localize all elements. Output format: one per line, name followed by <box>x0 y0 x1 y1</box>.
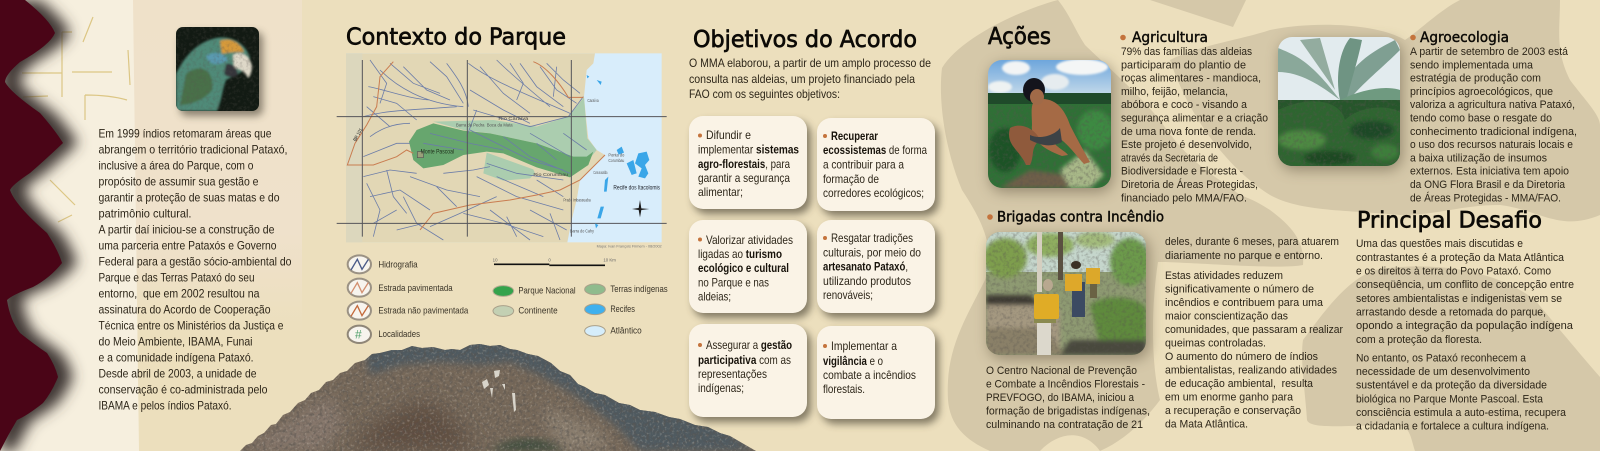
intro text block: propósito de assumir sua gestão e <box>98 174 259 188</box>
principal desafio text: opondo a integração da população indígena <box>1356 320 1574 332</box>
intro text block: Desde abril de 2003, a unidade de <box>98 366 257 380</box>
agricultura text: Biodiversidade e Floresta - <box>1121 166 1243 178</box>
legend: atlantico: Atlântico <box>610 326 642 336</box>
card: sistemas agro-florestais: agro-florestais, para <box>698 158 790 171</box>
agricultura text: abóbora e coco - visando a <box>1121 99 1248 111</box>
brigadas text column 2: deles, durante 6 meses, para atuarem <box>1165 236 1339 248</box>
card: gestao participativa: representações <box>698 368 767 381</box>
Agricultura section <box>1120 30 1268 204</box>
scale bar: 10 <box>493 258 498 263</box>
card: turismo ecologico <box>689 220 811 318</box>
card: gestao participativa: participativa com as <box>698 354 791 367</box>
agroecologia text: o uso dos recursos naturais locais e <box>1410 139 1573 151</box>
intro text block: e a comunidade indígena Pataxó. <box>98 350 254 364</box>
brigadas text column 2: significativamente o número de <box>1165 284 1314 296</box>
objectives intro text: consulta nas aldeias, um projeto financiado pela <box>689 73 915 86</box>
bullet <box>1410 35 1416 40</box>
legend: recifes: Recifes <box>610 304 635 314</box>
intro text block: entorno, que em 2002 resultou na <box>98 286 260 300</box>
map <box>337 53 667 248</box>
legend: terras indigenas <box>585 284 668 295</box>
Agroecologia section <box>1410 30 1577 204</box>
legend: hidrografia: Hidrografia <box>378 259 418 269</box>
agricultura text: 79% das famílias das aldeias <box>1121 46 1252 58</box>
intro text block: garantir a proteção de suas matas e do <box>98 190 280 204</box>
intro text block: Federal para a gestão sócio-ambiental do <box>98 254 292 268</box>
card: artesanato: renováveis; <box>823 289 873 302</box>
agroecologia text: estratégia de produção com <box>1410 73 1541 85</box>
agroecologia text: sendo implementada uma <box>1410 59 1534 71</box>
map legend <box>348 255 668 343</box>
legend: localidades: Localidades <box>378 329 420 339</box>
agroecologia text: tendo como base o resgate do <box>1410 112 1552 124</box>
principal desafio text: Uma das questões mais discutidas e <box>1356 238 1523 250</box>
card: recuperar ecossistemas: Recuperar <box>831 130 878 143</box>
map: Caraíva <box>587 98 599 103</box>
brigadas text column 1: culminando na contratação de 21 <box>986 419 1143 431</box>
intro text block: abrangem o território tradicional Pataxó, <box>98 142 288 156</box>
agroecologia text: externos. Esta iniciativa tem apoio <box>1410 166 1569 178</box>
photo: banana plants <box>1278 37 1402 170</box>
brigadas text column 2: a recuperação e conservação <box>1165 405 1301 417</box>
intro text block: Em 1999 índios retomaram áreas que <box>98 126 272 140</box>
principal desafio text: e os direitos à terra do Povo Pataxó. Como <box>1356 266 1551 278</box>
intro text block: Parque e das Terras Pataxó do seu <box>98 270 254 284</box>
heading: Principal Desafio: Principal Desafio <box>1357 208 1542 234</box>
card: recuperar ecossistemas: a contribuir para a <box>823 158 904 172</box>
card: turismo ecologico: Valorizar atividades <box>706 234 793 247</box>
map: Barra da Pedra Boca da Mata <box>456 123 513 128</box>
agricultura text: de uma nova fonte de renda. <box>1121 126 1256 138</box>
card: turismo ecologico: no Parque e nas <box>698 276 769 290</box>
map: Monte Pascoal <box>421 149 454 156</box>
agricultura text: milho, feijão, melancia, <box>1121 86 1228 98</box>
parrot photo <box>176 27 263 116</box>
agroecologia text: princípios agroecológicos, que <box>1410 86 1553 98</box>
legend: recifes <box>585 304 635 315</box>
agricultura text: através da Secretaria de <box>1121 152 1218 164</box>
card: artesanato: culturais, por meio do <box>823 246 921 260</box>
principal desafio text: arrastando desde a retomada do parque, <box>1356 306 1546 318</box>
brigadas text column 1: O Centro Nacional de Prevenção <box>986 365 1137 377</box>
principal desafio text: contrastantes é a proteção da Mata Atlântica <box>1356 252 1565 264</box>
brigadas text column 2: em um enorme ganho para <box>1165 392 1294 404</box>
objectives intro text: FAO com os seguintes objetivos: <box>689 88 840 101</box>
card: recuperar ecossistemas: corredores ecológicos; <box>823 187 924 200</box>
map: Rio Caraíva <box>498 116 529 121</box>
agricultura text <box>1121 46 1268 204</box>
mountain photo <box>240 336 756 451</box>
intro text block: inclusive a área do Parque, com o <box>98 158 254 172</box>
brigadas text column 1: formação de brigadistas indígenas, <box>986 406 1150 418</box>
card: sistemas agro-florestais: garantir a segurança <box>698 172 790 185</box>
bullet <box>987 214 993 220</box>
agricultura text: financiado pelo MMA/FAO. <box>1121 192 1247 204</box>
map: Prado Imbassuaba <box>563 197 591 202</box>
brigadas text column 2: da Mata Atlântica. <box>1165 418 1248 430</box>
card: vigilancia: Implementar a <box>831 340 897 353</box>
intro text block: A partir daí iniciou-se a construção de <box>98 222 275 236</box>
map: Rio Corumbau <box>533 172 569 177</box>
brigadas text column 2: Estas atividades reduzem <box>1165 270 1283 282</box>
brigadas text column 2: ambientalistas, realizando atividades <box>1165 364 1337 376</box>
legend: estrada pavimentada: Estrada pavimentada <box>378 283 453 293</box>
card: recuperar ecossistemas <box>817 118 939 216</box>
brigadas text column 1 <box>986 365 1150 431</box>
principal desafio text: consciência estimula a auto-estima, recupera <box>1356 407 1567 419</box>
card: gestao participativa: indígenas; <box>698 382 744 395</box>
legend: continente <box>493 306 558 316</box>
intro text block: do Meio Ambiente, IBAMA, Funai <box>98 334 252 348</box>
card: recuperar ecossistemas: formação de <box>823 173 879 186</box>
legend: estrada pavimentada <box>348 279 453 297</box>
map: Corumbau <box>608 158 625 163</box>
left paper panel <box>0 0 302 451</box>
brigadas text column 1: PREVFOGO, do IBAMA, iniciou a <box>986 392 1135 404</box>
card: artesanato <box>817 220 939 318</box>
map: BR 101 <box>352 127 364 143</box>
principal desafio text: sustentável e da proteção da diversidade <box>1356 380 1547 392</box>
photo: fire brigade <box>983 232 1150 359</box>
intro text block <box>98 126 292 412</box>
principal desafio text: com a proteção da floresta. <box>1356 334 1482 346</box>
scale bar: 0 <box>548 258 551 263</box>
brigadas text column 2: diariamente no parque e entorno. <box>1165 250 1323 262</box>
card: gestao participativa: Assegurar a gestão <box>706 339 792 352</box>
card: sistemas agro-florestais: implementar sistemas <box>698 144 799 156</box>
card: vigilancia: combate a incêndios <box>823 369 916 382</box>
intro text block: conservação é co-administrada pelo <box>98 382 268 396</box>
agroecologia text: da ONG Flora Brasil e da Diretoria <box>1410 179 1566 191</box>
card: gestao participativa <box>689 324 811 422</box>
scale bar: 10 Km <box>603 258 616 263</box>
brigadas text column 2: incêndios e contribuem para uma <box>1165 297 1324 309</box>
card: vigilancia: florestais. <box>823 383 865 396</box>
camouflage background pattern <box>941 0 1600 451</box>
card: artesanato: utilizando produtos <box>823 275 911 288</box>
legend: estrada nao pavimentada: Estrada não pavimentada <box>378 306 468 316</box>
agroecologia text: a baixa utilização de insumos <box>1410 152 1547 164</box>
principal desafio text: biológica no Parque Monte Pascoal. Esta <box>1356 394 1544 406</box>
card: artesanato: Resgatar tradições <box>831 232 913 245</box>
brigadas text column 2: O aumento do número de índios <box>1165 351 1318 363</box>
card: sistemas agro-florestais: Difundir e <box>706 129 751 142</box>
heading: Agricultura: Agricultura <box>1132 30 1208 46</box>
card: turismo ecologico: ecológico e cultural <box>698 262 789 275</box>
principal desafio text: No entanto, os Pataxó reconhecem a <box>1356 352 1527 364</box>
heading: Objetivos do Acordo: Objetivos do Acordo <box>693 27 917 53</box>
legend: parque nacional: Parque Nacional <box>518 286 576 296</box>
brigadas text column 1: e Combate a Incêndios Florestais - <box>986 379 1145 391</box>
legend: atlantico <box>585 326 642 336</box>
brigadas text column 2: maior conscientização das <box>1165 310 1288 322</box>
heading: Contexto do Parque: Contexto do Parque <box>346 24 566 50</box>
Brigadas section heading <box>987 210 1164 226</box>
map: Mapa: Ivan François Firmem - 08/2002 <box>597 244 662 248</box>
principal desafio text: conseqüência, um conflito de concepção entre <box>1356 279 1574 291</box>
card: vigilancia <box>817 326 939 424</box>
intro text block: assinatura do Acordo de Cooperação <box>98 302 271 316</box>
legend: continente: Continente <box>518 306 558 316</box>
map: Barra do Cahy <box>570 229 595 234</box>
card: recuperar ecossistemas: ecossistemas de forma <box>823 144 927 157</box>
intro text block: IBAMA e pelos índios Pataxó. <box>98 398 232 412</box>
brigadas text column 2: de educação ambiental, resulta <box>1165 378 1314 390</box>
card: artesanato: artesanato Pataxó, <box>823 260 908 274</box>
scale bar <box>493 258 616 265</box>
principal desafio text: a cidadania e fortalece a cultura indígena. <box>1356 420 1549 432</box>
agricultura text: roças alimentares - mandioca, <box>1121 73 1261 85</box>
legend: localidades: # <box>355 328 362 342</box>
agroecologia text: de Áreas Protegidas - MMA/FAO. <box>1410 191 1561 204</box>
heading: Brigadas contra Incendio: Brigadas contra Incêndio <box>997 210 1164 226</box>
brigadas text column 2: comunidades, que passaram a realizar <box>1165 324 1343 336</box>
bullet <box>1120 35 1126 40</box>
agricultura text: Este projeto é desenvolvido, <box>1121 139 1252 151</box>
heading: Ações: Ações <box>988 24 1051 50</box>
principal desafio text: necessidade de um desenvolvimento <box>1356 366 1530 378</box>
maroon torn edge <box>0 0 63 451</box>
legend: localidades <box>348 326 420 343</box>
card: sistemas agro-florestais: alimentar; <box>698 186 743 199</box>
photo: farmer in field <box>988 59 1113 192</box>
agroecologia text <box>1410 46 1577 204</box>
agroecologia text: A partir de setembro de 2003 está <box>1410 46 1569 58</box>
objectives intro text <box>689 57 931 101</box>
card: vigilancia: vigilância e o <box>823 355 883 368</box>
map: Recife dos Itacolomis <box>613 184 660 191</box>
intro text block: uma parceria entre Pataxós e Governo <box>98 238 277 252</box>
principal desafio text: setores ambientalistas e indigenistas vem se <box>1356 293 1562 305</box>
map: Ponta do <box>608 153 625 158</box>
agroecologia text: valoriza a agricultura nativa Pataxó, <box>1410 99 1575 111</box>
agroecologia text: conhecimento tradicional indígena, <box>1410 126 1577 138</box>
brigadas text column 2: queimas controladas. <box>1165 338 1266 350</box>
principal desafio text <box>1356 238 1574 432</box>
map: Cumuruxatiba <box>593 170 608 175</box>
intro text block: patrimônio cultural. <box>98 206 192 220</box>
legend: hidrografia <box>348 255 418 273</box>
card: sistemas agro-florestais <box>689 116 811 214</box>
agricultura text: Diretoria de Áreas Protegidas, <box>1121 178 1258 191</box>
card: turismo ecologico: ligadas ao turismo <box>698 248 782 261</box>
agricultura text: segurança alimentar e a criação <box>1121 112 1268 124</box>
legend: parque nacional <box>493 286 576 296</box>
heading: Agroecologia: Agroecologia <box>1420 30 1509 46</box>
card: turismo ecologico: aldeias; <box>698 290 731 304</box>
agricultura text: participaram do plantio de <box>1121 59 1246 71</box>
intro text block: Técnica entre os Ministérios da Justiça e <box>98 318 284 332</box>
brigadas text column 2 <box>1165 236 1343 430</box>
objectives intro text: O MMA elaborou, a partir de um amplo processo de <box>689 57 931 70</box>
legend: estrada nao pavimentada <box>348 302 468 320</box>
legend: terras indigenas: Terras indígenas <box>610 284 668 294</box>
